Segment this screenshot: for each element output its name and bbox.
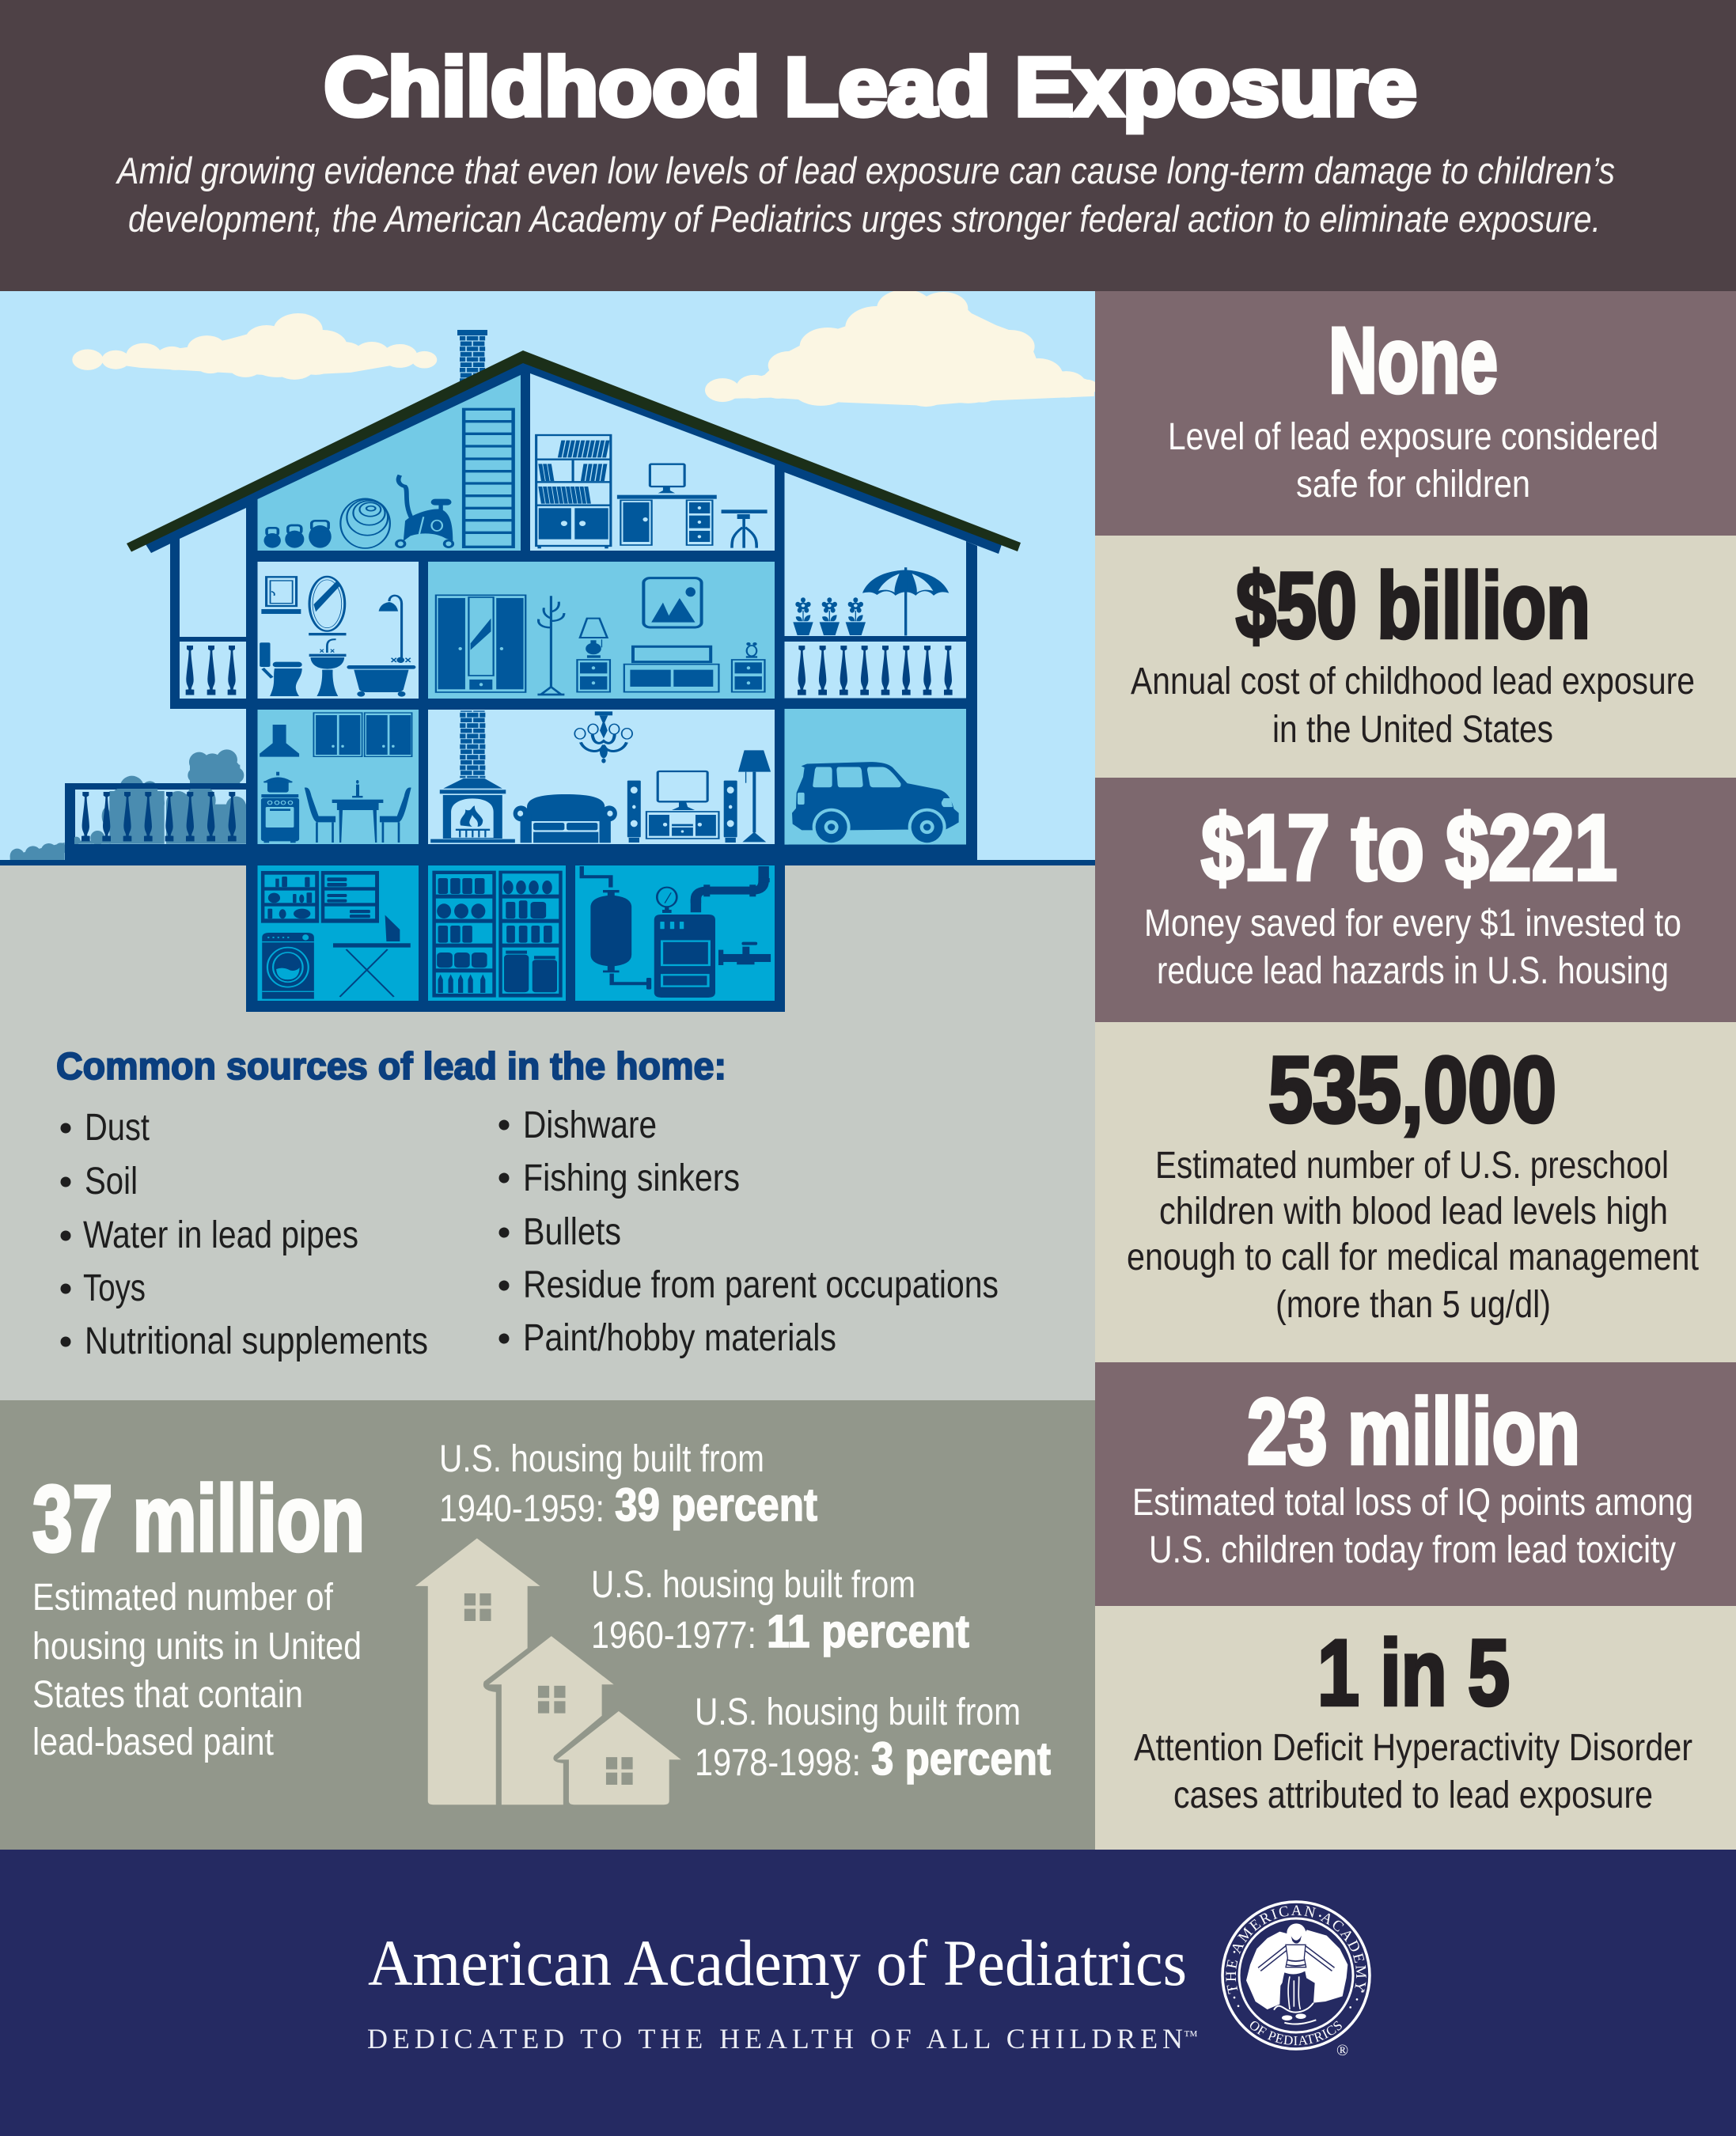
icon: stool bbox=[722, 509, 768, 548]
floor 1 left: kitchen bbox=[260, 713, 412, 843]
panel: header bbox=[0, 0, 1736, 291]
stat description bbox=[1127, 1145, 1699, 1326]
stat value: 1 in 5 bbox=[1317, 1621, 1510, 1725]
stat value: 535,000 bbox=[1268, 1038, 1556, 1142]
tagline: ™ bbox=[1184, 2028, 1198, 2043]
icon: oval mirror bbox=[309, 577, 346, 635]
text: lead-based paint description: lead-based paint bbox=[32, 1721, 274, 1763]
chimney bbox=[457, 330, 487, 383]
icon: bathroom window bbox=[261, 577, 301, 614]
registered mark: ® bbox=[1336, 2042, 1348, 2059]
icon: dining chairs bbox=[305, 788, 411, 843]
icon: AAP seal: THE AMERICAN ACADEMY bbox=[1226, 1905, 1366, 1994]
attic left: gym room bbox=[263, 409, 514, 548]
stat value: $17 to $221 bbox=[1201, 796, 1617, 900]
icon: laundry shelves bbox=[261, 871, 379, 923]
text: 1960-1977 housing bbox=[591, 1564, 969, 1657]
icon: car bbox=[789, 762, 968, 848]
text: 1940-1959 housing: 39 percent bbox=[615, 1479, 817, 1531]
icon: table lamp bbox=[580, 619, 607, 658]
icon: framed picture bbox=[643, 578, 702, 627]
stat description bbox=[1134, 1727, 1692, 1816]
icon: bathtub bbox=[347, 665, 415, 697]
list: sources, left column: Dust bbox=[85, 1107, 150, 1149]
icon: bookcase bbox=[536, 435, 611, 548]
cloud: left bbox=[72, 313, 437, 380]
list: sources, right column: Paint/hobby materials bbox=[523, 1317, 836, 1359]
stat description: safe for children bbox=[1296, 464, 1530, 506]
title: Childhood Lead Exposure bbox=[324, 41, 1416, 133]
icon: sofa bbox=[514, 794, 617, 843]
icon: coat stand bbox=[537, 596, 564, 695]
icon: range hood bbox=[260, 725, 299, 757]
house walls bbox=[65, 361, 977, 1012]
text: 1960-1977 housing: 1960-1977: bbox=[591, 1615, 756, 1657]
text: 1978-1998 housing: 1978-1998: bbox=[695, 1742, 861, 1784]
text: 1960-1977 housing: U.S. housing built from bbox=[591, 1564, 915, 1606]
icon: wardrobe bbox=[436, 595, 525, 692]
icon: bed bbox=[624, 646, 718, 692]
stat description bbox=[1168, 416, 1658, 506]
icon: nightstand right bbox=[732, 660, 764, 692]
stat value: 23 million bbox=[1247, 1380, 1580, 1484]
ground background bbox=[0, 862, 1095, 1402]
icon: chandelier bbox=[574, 711, 632, 763]
icon: wall cabinets bbox=[313, 713, 412, 756]
icon: exercise bike bbox=[396, 475, 453, 547]
icon: speakers bbox=[627, 781, 737, 843]
tagline: DEDICATED TO THE HEALTH OF ALL CHILDREN bbox=[367, 2023, 1183, 2055]
icon: exercise ball bbox=[340, 498, 390, 548]
roof bbox=[127, 350, 1021, 552]
roof underside band bbox=[146, 361, 1002, 554]
panel: house illustration scene bbox=[0, 290, 1097, 1402]
stat description: children with blood lead levels high bbox=[1159, 1191, 1668, 1233]
ground line bbox=[0, 860, 1095, 865]
stat: 37 million: 37 million bbox=[32, 1467, 365, 1571]
stat description bbox=[1144, 903, 1681, 992]
rooms bbox=[75, 373, 966, 1001]
icon: stove bbox=[261, 794, 299, 843]
icon: kettlebells bbox=[263, 521, 332, 548]
icon: computer desk bbox=[617, 464, 717, 545]
icon: shower bbox=[379, 596, 411, 663]
stat description bbox=[1132, 1482, 1693, 1571]
stat value: None bbox=[1329, 309, 1498, 413]
text: 1978-1998 housing: 3 percent bbox=[871, 1733, 1051, 1785]
attic right: office bbox=[536, 435, 768, 548]
list: sources, left column: Soil bbox=[85, 1161, 138, 1202]
list: sources, left column: Water in lead pipes bbox=[83, 1214, 358, 1256]
list: sources, right column: Fishing sinkers bbox=[523, 1157, 740, 1199]
panel: stat 50 billion bbox=[1095, 536, 1736, 778]
text: 1978-1998 housing bbox=[695, 1691, 1051, 1785]
basement bbox=[261, 866, 771, 999]
icon: potted flowers bbox=[793, 597, 866, 635]
organization name: American Academy of Pediatrics bbox=[368, 1926, 1187, 1999]
heading: common sources of lead: Common sources of lead in the home: bbox=[56, 1046, 726, 1088]
list: sources, right column: Bullets bbox=[523, 1211, 621, 1253]
icon: wall ladder shelf bbox=[464, 409, 514, 547]
icon: toilet bbox=[260, 642, 302, 696]
panel: stat 23 million bbox=[1095, 1362, 1736, 1606]
icon: washing machine bbox=[262, 933, 314, 999]
text: 1940-1959 housing: U.S. housing built from bbox=[439, 1438, 764, 1480]
terrace railing bbox=[65, 710, 258, 865]
list: sources, left column: Nutritional supplements bbox=[85, 1320, 428, 1362]
icon: small house bbox=[557, 1711, 681, 1805]
panel: stat 1 in 5 bbox=[1095, 1606, 1736, 1850]
icon: boiler with gauge and valve bbox=[654, 866, 771, 998]
cloud: right bbox=[705, 290, 1097, 407]
sky background bbox=[0, 291, 1095, 862]
panel: stat 535,000 bbox=[1095, 1022, 1736, 1362]
floor 2 center: bedroom bbox=[436, 578, 764, 695]
icon: three houses bbox=[415, 1538, 681, 1805]
icon: AAP seal: OF PEDIATRICS bbox=[1250, 2020, 1342, 2046]
list: sources, right column: Residue from parent occupations bbox=[523, 1264, 999, 1306]
icon: patio umbrella bbox=[862, 567, 949, 635]
text: lead-based paint description: housing units in United bbox=[32, 1626, 362, 1668]
icon: cooking pot bbox=[263, 772, 293, 793]
list: sources, left column bbox=[60, 1107, 428, 1362]
icon: television and media console bbox=[646, 771, 718, 839]
stat description: in the United States bbox=[1272, 709, 1553, 751]
icon: pantry shelves with jars bbox=[432, 871, 563, 998]
icon: fireplace bbox=[430, 710, 515, 843]
garage: right balcony items and car bbox=[789, 567, 968, 848]
subtitle bbox=[115, 150, 1615, 240]
text: lead-based paint description bbox=[32, 1577, 362, 1763]
icon: dining table with candle bbox=[332, 780, 383, 843]
text: 1940-1959 housing bbox=[439, 1438, 817, 1531]
text: lead-based paint description: Estimated number of bbox=[32, 1577, 334, 1619]
icon: floor lamp bbox=[738, 750, 771, 842]
ground shrub bbox=[10, 843, 66, 863]
panel: stat None bbox=[1095, 291, 1736, 536]
list: sources, left column: Toys bbox=[83, 1267, 146, 1309]
panel: 37 million housing units bbox=[0, 1400, 1095, 1850]
text: 1940-1959 housing: 1940-1959: bbox=[439, 1488, 605, 1530]
icon: medium house bbox=[489, 1636, 614, 1805]
icon: expansion tank and pipes bbox=[582, 866, 651, 990]
panel: footer bbox=[0, 1850, 1736, 2136]
text: 1960-1977 housing: 11 percent bbox=[767, 1606, 969, 1657]
icon: balcony rail bbox=[798, 646, 953, 695]
icon: ironing board bbox=[333, 915, 411, 997]
text: 1978-1998 housing: U.S. housing built from bbox=[695, 1691, 1021, 1733]
stat value: $50 billion bbox=[1236, 554, 1590, 658]
panel: stat 17 to 221 bbox=[1095, 778, 1736, 1022]
left balcony balusters bbox=[186, 646, 236, 695]
icon: alarm clock bbox=[746, 642, 757, 658]
icon: tall house bbox=[415, 1538, 540, 1805]
list: sources, right column bbox=[498, 1104, 999, 1359]
floor 2 left: bathroom bbox=[260, 577, 415, 697]
list: sources, right column: Dishware bbox=[523, 1104, 657, 1146]
stat description bbox=[1131, 661, 1695, 751]
icon: nightstand left bbox=[577, 660, 610, 692]
stat description: (more than 5 ug/dl) bbox=[1275, 1284, 1551, 1326]
icon: AAP seal bbox=[1221, 1900, 1371, 2059]
stat description: Level of lead exposure considered bbox=[1168, 416, 1658, 458]
bushes behind terrace bbox=[73, 749, 246, 845]
icon: sink bbox=[309, 639, 346, 696]
text: lead-based paint description: States that contain bbox=[32, 1674, 303, 1716]
stat description: cases attributed to lead exposure bbox=[1173, 1774, 1653, 1816]
floor 1 center: living room bbox=[430, 710, 771, 843]
